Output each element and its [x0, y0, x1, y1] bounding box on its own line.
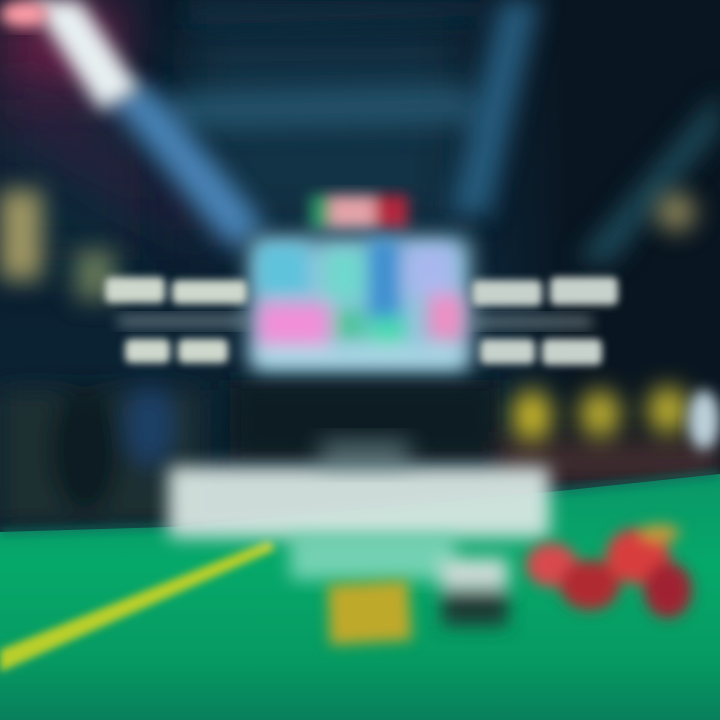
crowd silhouettes	[0, 380, 720, 525]
yellow die	[328, 580, 412, 645]
scoreboard top sign	[310, 195, 408, 229]
red balls	[526, 524, 692, 618]
blurred sub text strip	[118, 315, 592, 328]
blurred headline text left	[105, 277, 247, 363]
left wall lights	[0, 190, 696, 300]
central scoreboard	[250, 238, 470, 368]
translucent glass panel	[168, 440, 550, 580]
dark and white die	[440, 558, 508, 626]
green floor	[0, 474, 720, 720]
ceiling beams	[170, 0, 720, 265]
white figure at right edge	[688, 390, 720, 450]
blurred headline text right	[472, 277, 618, 365]
spotlight beam top left	[0, 0, 265, 250]
yellow hall lights	[512, 386, 689, 442]
yellow floor line	[0, 540, 275, 672]
